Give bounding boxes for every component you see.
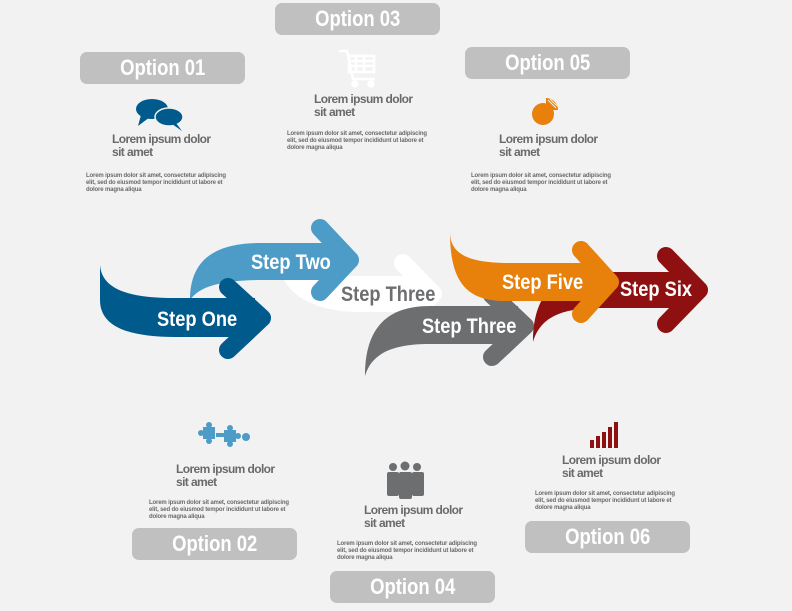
pill: Option 01 bbox=[80, 52, 245, 84]
icon: bar chart bbox=[590, 422, 618, 448]
label: Step Three gray: Step Three bbox=[422, 315, 516, 338]
arrow: Step One bbox=[100, 265, 262, 350]
text block: option 06: Lorem ipsum dolor bbox=[562, 453, 660, 467]
arrow: Step Two bbox=[190, 228, 350, 300]
label: Step Three white: Step Three bbox=[341, 283, 435, 306]
text block: option 06: Lorem ipsum dolor sit amet, consectetur adipiscing elit, sed do eiusmod tempor incididunt ut labore et dolore magna aliqua bbox=[535, 491, 675, 511]
icon: pie chart bbox=[532, 98, 558, 125]
text block: option 05: sit amet bbox=[499, 145, 540, 159]
text block: option 02: Lorem ipsum dolor bbox=[176, 462, 274, 476]
pill: Option 01: Option 01 bbox=[120, 55, 205, 80]
label: Step One: Step One bbox=[157, 308, 237, 331]
text block: option 01 bbox=[86, 132, 226, 193]
pill: Option 05: Option 05 bbox=[505, 50, 590, 75]
text block: option 06: sit amet bbox=[562, 466, 603, 480]
text block: option 06 bbox=[535, 453, 675, 511]
text block: option 01: sit amet bbox=[112, 145, 153, 159]
pill: Option 06: Option 06 bbox=[565, 524, 650, 549]
arrow: Step Three gray bbox=[365, 295, 525, 376]
pill: Option 03 bbox=[275, 3, 440, 35]
text block: option 04: Lorem ipsum dolor sit amet, consectetur adipiscing elit, sed do eiusmod tempor incididunt ut labore et dolore magna aliqua bbox=[337, 541, 477, 561]
icon: people group bbox=[387, 462, 424, 499]
text block: option 05: Lorem ipsum dolor bbox=[499, 132, 597, 146]
text block: option 04: Lorem ipsum dolor bbox=[364, 503, 462, 517]
icon: speech bubbles bbox=[136, 99, 183, 131]
text block: option 03 bbox=[287, 92, 427, 151]
arrow: Step Six bbox=[533, 256, 699, 342]
pill: Option 03: Option 03 bbox=[315, 6, 400, 31]
text block: option 01: Lorem ipsum dolor bbox=[112, 132, 210, 146]
text block: option 03: Lorem ipsum dolor bbox=[314, 92, 412, 106]
text block: option 02 bbox=[149, 462, 289, 520]
text block: option 03: Lorem ipsum dolor sit amet, consectetur adipiscing elit, sed do eiusmod tempor incididunt ut labore et dolore magna aliqua bbox=[287, 131, 427, 151]
pill: Option 02 bbox=[132, 528, 297, 560]
arrow: Step Three white bbox=[280, 263, 433, 325]
text block: option 02: Lorem ipsum dolor sit amet, consectetur adipiscing elit, sed do eiusmod tempor incididunt ut labore et dolore magna aliqua bbox=[149, 500, 289, 520]
text block: option 01: Lorem ipsum dolor sit amet, consectetur adipiscing elit, sed do eiusmod tempor incididunt ut labore et dolore magna aliqua bbox=[86, 173, 226, 193]
text block: option 04: sit amet bbox=[364, 516, 405, 530]
text block: option 04 bbox=[337, 503, 477, 561]
icon: shopping cart bbox=[339, 51, 375, 86]
text block: option 02: sit amet bbox=[176, 475, 217, 489]
text block: option 03: sit amet bbox=[314, 105, 355, 119]
text block: option 05 bbox=[471, 132, 611, 193]
label: Step Two: Step Two bbox=[251, 251, 331, 274]
pill: Option 04: Option 04 bbox=[370, 574, 455, 599]
pill: Option 04 bbox=[330, 571, 495, 603]
text block: option 05: Lorem ipsum dolor sit amet, consectetur adipiscing elit, sed do eiusmod tempor incididunt ut labore et dolore magna aliqua bbox=[471, 173, 611, 193]
icon: puzzle bbox=[198, 422, 250, 447]
pill: Option 06 bbox=[525, 521, 690, 553]
arrow: Step Five bbox=[450, 232, 610, 314]
label: Step Five: Step Five bbox=[502, 271, 583, 294]
pill: Option 02: Option 02 bbox=[172, 531, 257, 556]
pill: Option 05 bbox=[465, 47, 630, 79]
label: Step Six: Step Six bbox=[620, 278, 692, 301]
